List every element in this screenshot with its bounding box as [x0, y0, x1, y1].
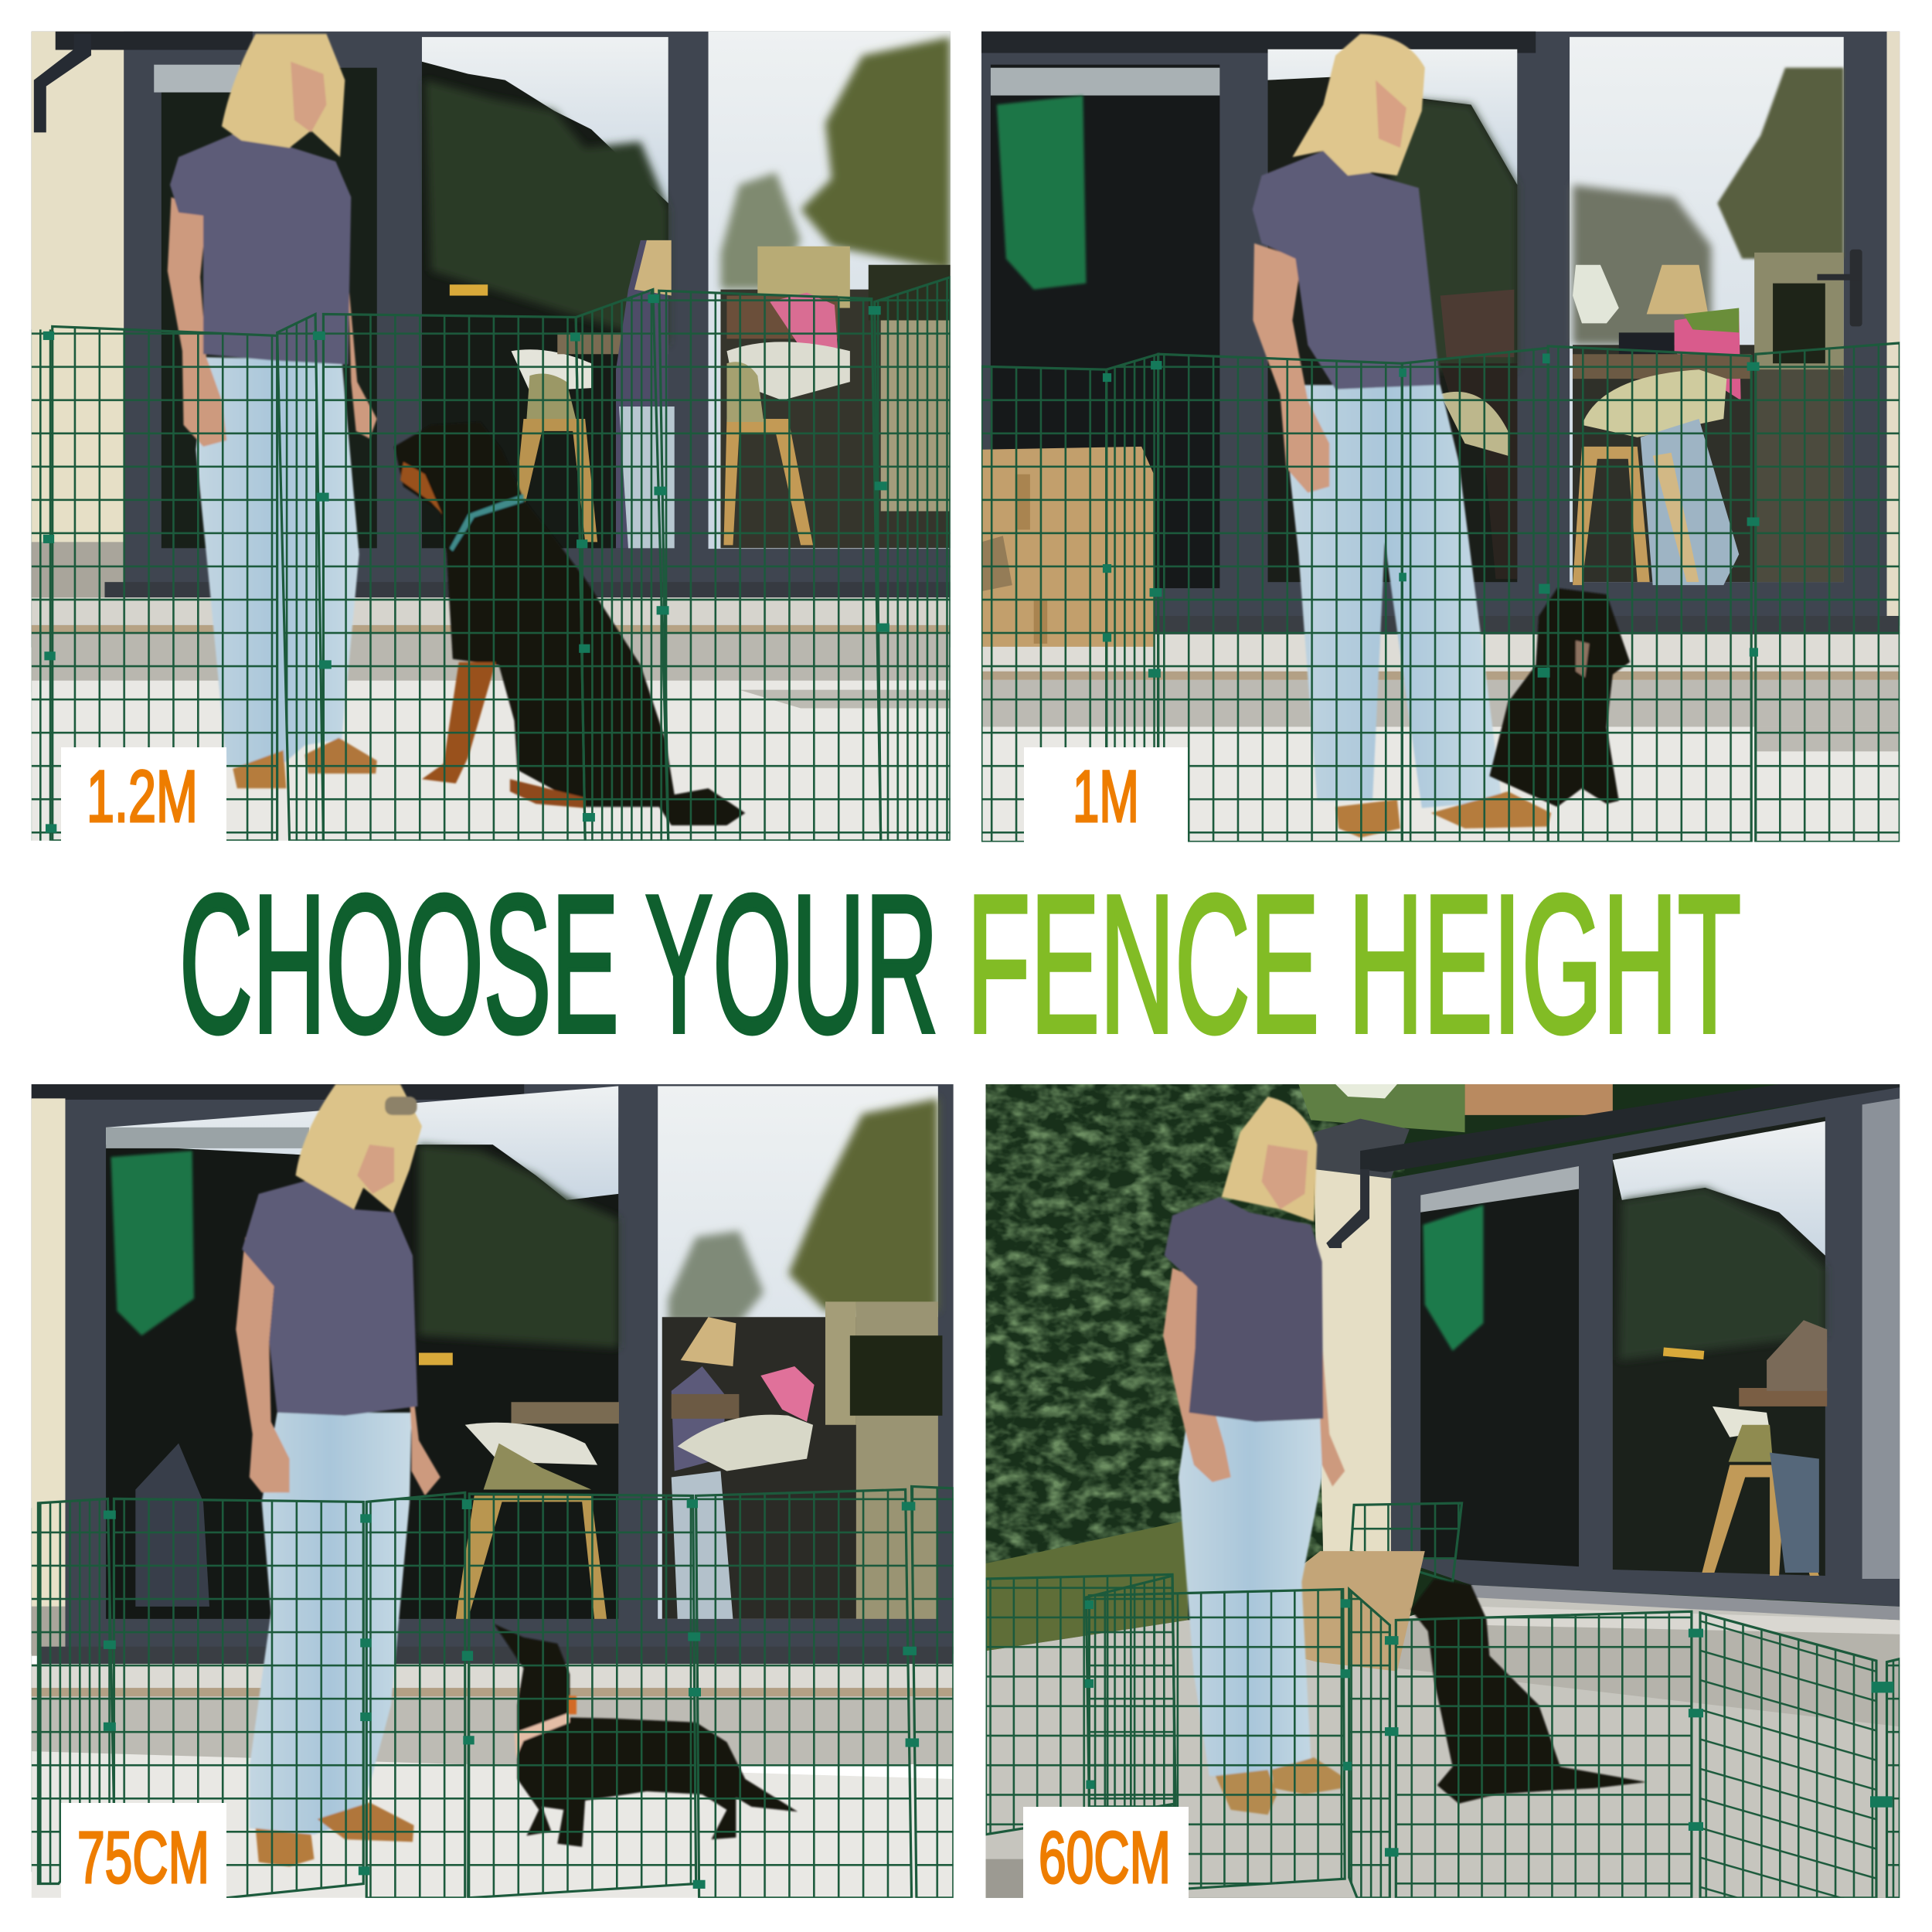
patio steps and floor — [32, 597, 951, 841]
label box: 1.2M: 1.2M — [87, 756, 198, 838]
label box: 1M — [1024, 747, 1188, 842]
background trees and sky — [986, 1084, 1900, 1898]
label box: 1.2M — [61, 747, 226, 842]
cardboard box — [981, 447, 1154, 647]
house wall, roof and windows — [1314, 1084, 1900, 1620]
panel: 1m fence photo — [981, 32, 1900, 842]
label box: 60CM: 60CM — [1039, 1817, 1171, 1899]
patio steps and floor — [986, 1597, 1900, 1898]
woman standing — [1163, 1097, 1345, 1815]
panel: 60cm fence photo — [986, 1084, 1900, 1898]
fence clips — [1103, 353, 1760, 678]
fence clips — [43, 294, 889, 833]
fence clips — [104, 1499, 919, 1889]
label box: 75CM — [61, 1803, 226, 1899]
rottweiler dog — [394, 422, 745, 825]
title: choose your: CHOOSE YOUR — [179, 854, 938, 1073]
woman standing — [236, 1084, 440, 1866]
cardboard box and spare fence panel — [1243, 1503, 1462, 1672]
house wall and windows — [32, 1084, 954, 1664]
fence clips — [1085, 1599, 1893, 1856]
wire fence panels — [32, 277, 951, 841]
patio steps and floor — [981, 634, 1900, 842]
house wall and windows — [981, 32, 1900, 634]
panel: 75cm fence photo — [32, 1084, 954, 1898]
panel: 1.2m fence photo — [32, 32, 951, 841]
house wall and windows — [32, 32, 951, 648]
woman standing — [168, 34, 377, 788]
patio steps and floor — [32, 1664, 954, 1898]
label box: 75CM: 75CM — [77, 1817, 209, 1899]
woman standing — [1253, 34, 1551, 838]
wire fence panels — [32, 1486, 954, 1898]
label box: 1M: 1M — [1073, 756, 1139, 838]
wire fence panels — [981, 343, 1900, 842]
black cockapoo dog — [1489, 588, 1630, 807]
wire fence panels — [986, 1574, 1900, 1898]
dachshund dog — [494, 1624, 798, 1847]
label box: 60CM — [1023, 1807, 1189, 1899]
black cockapoo dog — [1410, 1579, 1647, 1804]
title — [179, 854, 1741, 1073]
grass slope — [986, 1520, 1188, 1651]
